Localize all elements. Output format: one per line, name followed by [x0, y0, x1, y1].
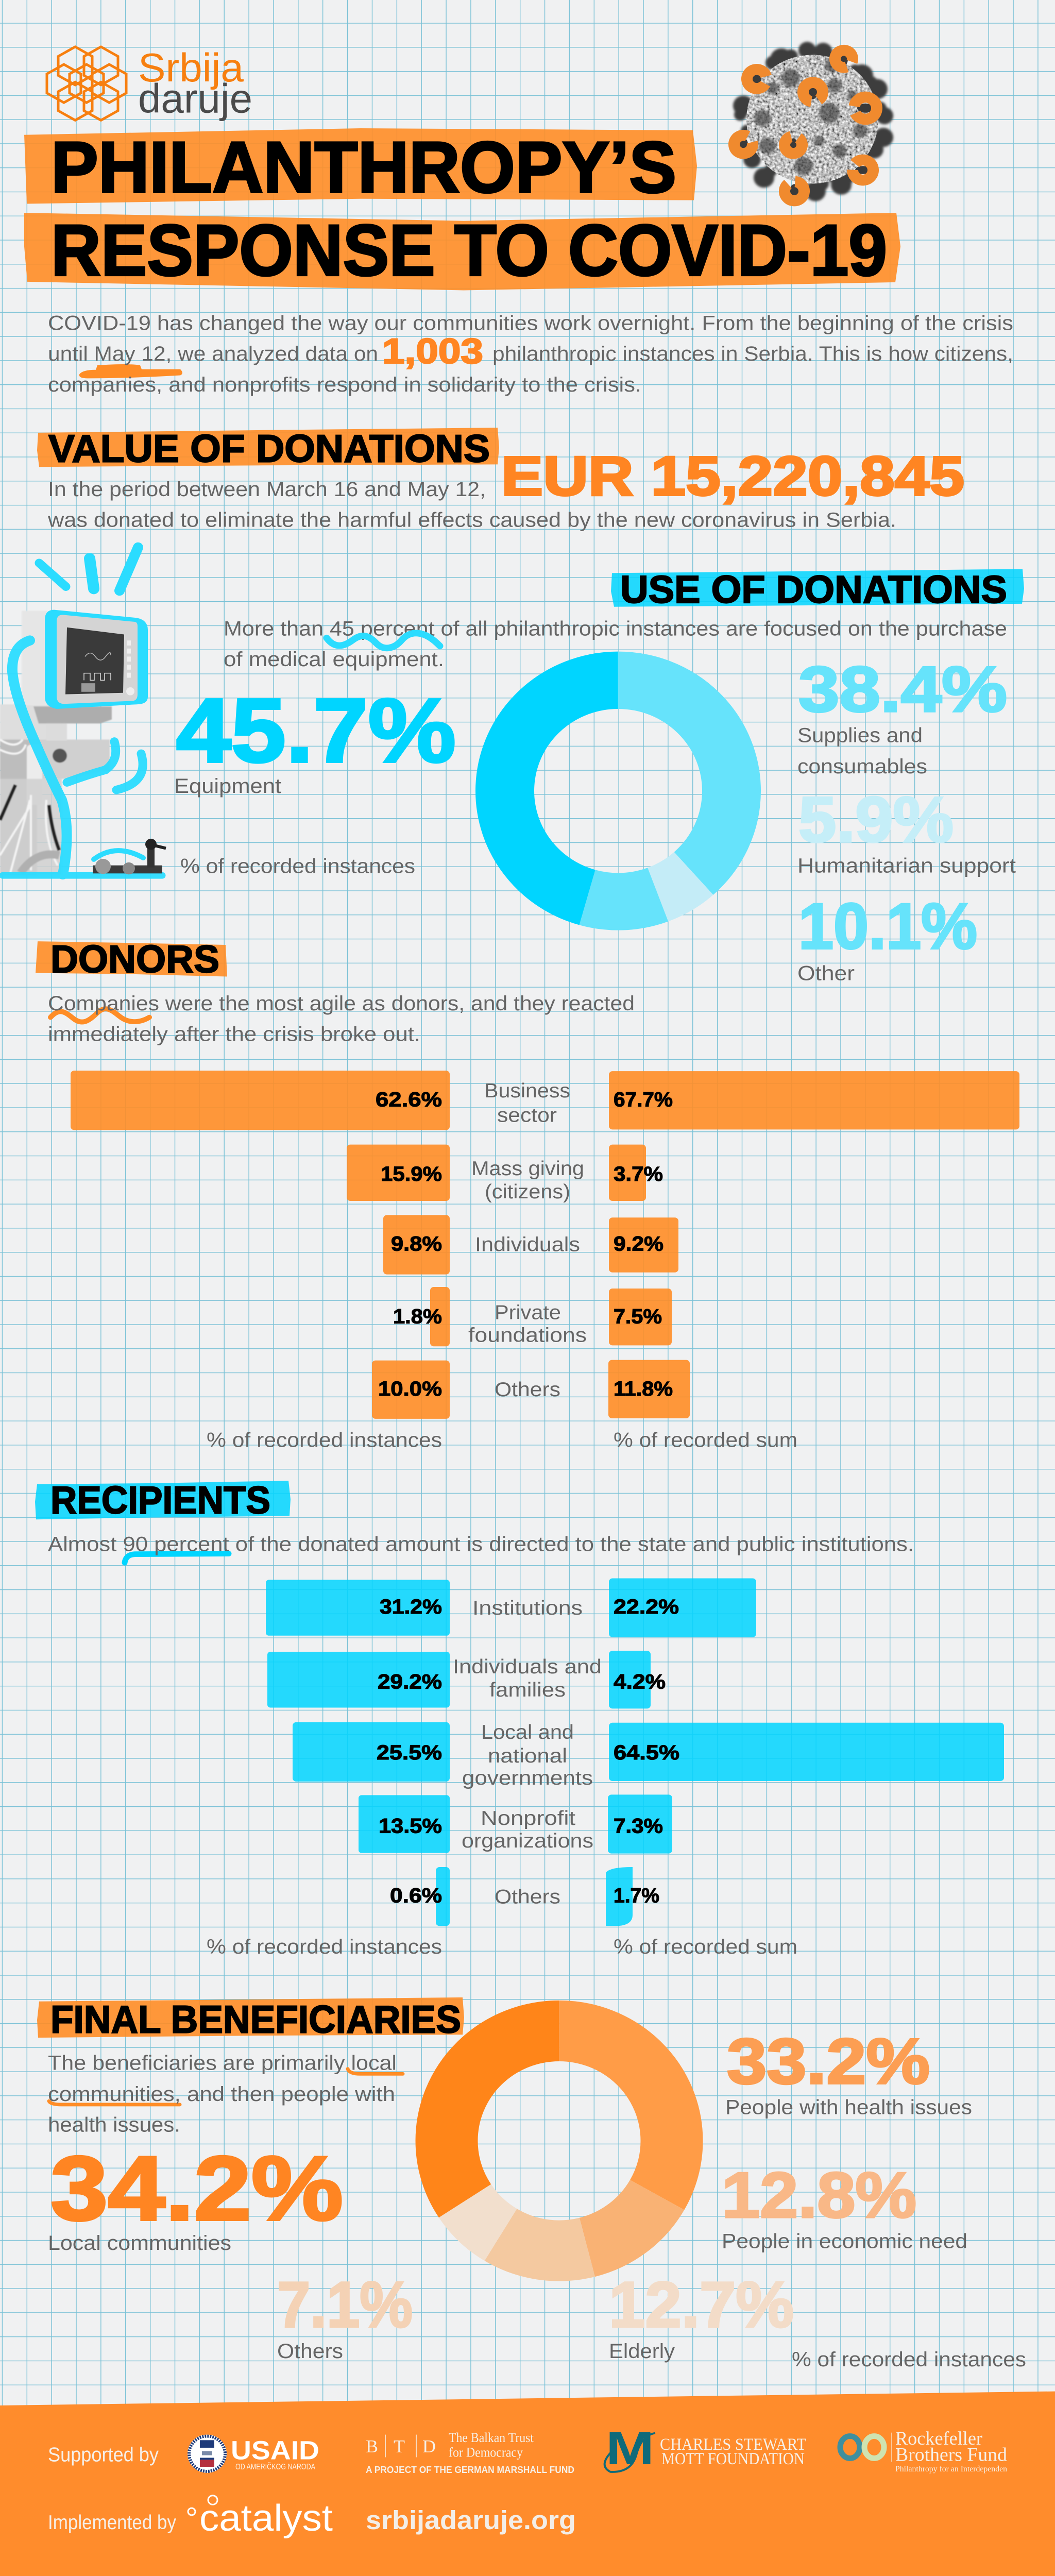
- supported by label: Supported by: [48, 2444, 159, 2466]
- row: business sector: sector: [497, 1104, 557, 1127]
- logo: Rockefeller Brothers Fund: Rockefeller: [895, 2428, 982, 2449]
- value of donations text: [47, 477, 896, 531]
- row: others: 0.6%: [390, 1884, 442, 1907]
- row: individuals: 9.2%: [614, 1232, 663, 1256]
- stat: 7.1% others: Others: [277, 2340, 343, 2363]
- stat: 45.7% equipment: Equipment: [174, 774, 281, 798]
- orange underlines: [348, 2069, 403, 2074]
- value of donations text: was donated to eliminate the harmful effects caused by the new coronavirus in Serbia.: [47, 508, 896, 531]
- row: local and national governments: 64.5%: [614, 1740, 679, 1764]
- dark centers of the rings: [739, 52, 874, 198]
- icon: coronavirus: [732, 42, 893, 201]
- axis captions: % of recorded instances: [207, 1935, 442, 1958]
- axis captions: % of recorded sum: [614, 1935, 797, 1958]
- logo: Rockefeller Brothers Fund: Philanthropy for an Interdependen: [895, 2465, 1007, 2473]
- logo: Balkan Trust: A PROJECT OF THE GERMAN MARSHALL FUND: [366, 2464, 574, 2475]
- value of donations text: In the period between March 16 and May 12,: [48, 477, 486, 501]
- row: local and national governments: 25.5%: [377, 1740, 442, 1764]
- row: individuals and families: 4.2%: [614, 1670, 666, 1693]
- stat: 12.7% elderly: 12.7%: [609, 2268, 794, 2341]
- row: local and national governments: Local and: [481, 1721, 574, 1743]
- logo: USAID: OD AMERIČKOG NARODA: [235, 2462, 315, 2471]
- logo: Balkan Trust: T: [394, 2436, 405, 2456]
- row: private foundations: [393, 1287, 672, 1346]
- stat: 38.4% supplies: 38.4%: [798, 653, 1007, 725]
- row: others: [390, 1867, 659, 1926]
- cyan squiggle: [327, 633, 440, 648]
- donut chart: use of donations: [505, 680, 731, 902]
- logo: Mott Foundation: [605, 2423, 806, 2475]
- row: individuals: 9.8%: [391, 1232, 442, 1256]
- row: others: 10.0%: [378, 1377, 442, 1400]
- row: individuals and families: [267, 1651, 666, 1708]
- stat: 34.2% local communities: Local communities: [48, 2231, 231, 2255]
- row: private foundations: foundations: [468, 1324, 587, 1346]
- row: others: Others: [495, 1886, 560, 1908]
- intro paragraph: until May 12, we analyzed data on: [48, 342, 378, 365]
- row: nonprofit organizations: 13.5%: [379, 1814, 442, 1838]
- logo: Srbija daruje: daruje: [138, 76, 252, 122]
- row: mass giving: [347, 1145, 663, 1203]
- cyan burst strokes: [39, 547, 138, 590]
- logo: USAID: USAID: [231, 2435, 319, 2465]
- stat: 38.4% supplies: [797, 653, 1007, 778]
- stat: 33.2% people with health issues: [725, 2025, 972, 2119]
- logo: Srbija daruje: Srbija: [138, 45, 244, 90]
- stat: 5.9% humanitarian support: Humanitarian support: [797, 854, 1016, 877]
- row: business sector: 67.7%: [614, 1088, 673, 1111]
- stat: 12.8% people in economic need: 12.8%: [722, 2159, 916, 2231]
- stat: 12.8% people in economic need: [722, 2159, 967, 2252]
- row: institutions: 22.2%: [614, 1595, 679, 1618]
- stat: 7.1% others: 7.1%: [277, 2268, 413, 2341]
- final beneficiaries text: [48, 2051, 403, 2137]
- row: private foundations: Private: [495, 1301, 561, 1324]
- row: others: 11.8%: [614, 1377, 673, 1400]
- gauge and regulator at base: [93, 839, 166, 874]
- donors text: [48, 991, 635, 1045]
- title line 2: RESPONSE TO COVID-19: [51, 210, 887, 291]
- stat: 12.7% elderly: Elderly: [609, 2340, 675, 2363]
- stat: 33.2% people with health issues: People with health issues: [725, 2095, 972, 2119]
- row: individuals: [383, 1215, 678, 1275]
- row: mass giving: (citizens): [485, 1181, 570, 1203]
- row: individuals and families: 29.2%: [378, 1670, 442, 1693]
- illustration: ventilator with cyan strokes: [0, 547, 166, 875]
- logo: Balkan Trust: [366, 2430, 574, 2475]
- heading: recipients: RECIPIENTS: [50, 1479, 270, 1522]
- row: others: Others: [495, 1378, 560, 1401]
- orange squiggle: [50, 1009, 149, 1022]
- monitor: [45, 610, 148, 709]
- row: others: 1.7%: [614, 1884, 659, 1907]
- logo: Rockefeller Brothers Fund: Brothers Fund: [895, 2445, 1007, 2465]
- logo: Mott Foundation: CHARLES STEWART: [660, 2435, 806, 2454]
- row: private foundations: 7.5%: [614, 1304, 662, 1328]
- use of donations text: of medical equipment.: [224, 647, 444, 671]
- recipients text: Almost 90 percent of the donated amount is directed to the state and public institutions.: [48, 1532, 914, 1556]
- implemented by label: Implemented by: [48, 2512, 176, 2534]
- intro paragraph: 1,003: [382, 331, 483, 371]
- logo: Catalyst: catalyst: [199, 2498, 333, 2539]
- bar chart: donors: [71, 1071, 1019, 1451]
- row: institutions: Institutions: [472, 1597, 583, 1619]
- row: local and national governments: [293, 1721, 1004, 1789]
- logo: Balkan Trust: D: [422, 2436, 436, 2456]
- row: mass giving: Mass giving: [471, 1158, 584, 1180]
- axis captions: % of recorded instances: [207, 1428, 442, 1451]
- bar chart: recipients: [207, 1578, 1004, 1958]
- row: individuals and families: families: [489, 1679, 566, 1701]
- donors text: Companies were the most agile as donors, and they reacted: [48, 991, 635, 1015]
- stat: 45.7% equipment: 45.7%: [176, 680, 456, 781]
- axis captions: [207, 1935, 797, 1958]
- row: private foundations: 1.8%: [393, 1304, 442, 1328]
- row: individuals: Individuals: [475, 1233, 580, 1256]
- stat: 34.2% local communities: 34.2%: [50, 2138, 343, 2239]
- heading: value of donations: VALUE OF DONATIONS: [48, 427, 490, 470]
- row: institutions: 31.2%: [380, 1595, 442, 1618]
- row: others: [372, 1360, 690, 1419]
- footer band: [0, 2392, 1055, 2576]
- row: business sector: 62.6%: [376, 1088, 442, 1111]
- scribble under May 12: [79, 364, 182, 378]
- stat: 10.1% other: Other: [797, 961, 855, 985]
- stat: 38.4% supplies: consumables: [797, 754, 927, 778]
- cyan underline: [125, 1554, 229, 1563]
- axis captions: [207, 1428, 797, 1451]
- stat: 10.1% other: 10.1%: [798, 890, 977, 962]
- heading: use of donations: USE OF DONATIONS: [620, 568, 1007, 612]
- logo: Balkan Trust: The Balkan Trust: [449, 2430, 534, 2445]
- intro paragraph: philanthropic instances in Serbia. This is how citizens,: [492, 342, 1013, 365]
- heading: final beneficiaries: FINAL BENEFICIARIES: [50, 1998, 461, 2041]
- logo: USAID: [188, 2435, 319, 2473]
- row: mass giving: 3.7%: [614, 1162, 663, 1185]
- row: local and national governments: national: [488, 1744, 567, 1767]
- row: institutions: [266, 1578, 756, 1637]
- use of donations text: More than 45 percent of all philanthropic instances are focused on the purchase: [224, 617, 1007, 640]
- caption: % of recorded instances: % of recorded instances: [180, 854, 415, 877]
- logo: Balkan Trust: for Democracy: [449, 2445, 523, 2460]
- logo: Rockefeller Brothers Fund: [840, 2428, 1007, 2473]
- row: nonprofit organizations: organizations: [462, 1829, 593, 1852]
- final beneficiaries text: health issues.: [48, 2113, 180, 2137]
- stat: 5.9% humanitarian support: 5.9%: [798, 783, 954, 855]
- caption: % of recorded instances: % of recorded instances: [792, 2347, 1026, 2371]
- intro paragraph: [48, 311, 1013, 396]
- final beneficiaries text: The beneficiaries are primarily local: [48, 2051, 397, 2074]
- stat: 38.4% supplies: Supplies and: [797, 723, 923, 747]
- stat: 12.8% people in economic need: People in economic need: [722, 2229, 967, 2252]
- row: business sector: Business: [484, 1079, 570, 1102]
- row: mass giving: 15.9%: [381, 1162, 442, 1185]
- logo: Srbija daruje: [47, 45, 252, 122]
- row: nonprofit organizations: [359, 1794, 672, 1854]
- row: nonprofit organizations: Nonprofit: [481, 1807, 575, 1829]
- axis captions: % of recorded sum: [614, 1428, 797, 1451]
- row: business sector: [71, 1071, 1019, 1130]
- row: local and national governments: governments: [462, 1767, 593, 1789]
- ventilator body in grey: [0, 611, 112, 875]
- logo: Mott Foundation: M: [606, 2423, 654, 2475]
- big value: EUR 15,220,845: EUR 15,220,845: [501, 446, 964, 507]
- logo: Mott Foundation: MOTT FOUNDATION: [661, 2450, 805, 2468]
- stat: 33.2% people with health issues: 33.2%: [727, 2025, 930, 2097]
- title line 1: PHILANTHROPY’S: [51, 127, 676, 208]
- donut chart: final beneficiaries: [447, 2031, 672, 2251]
- row: nonprofit organizations: 7.3%: [614, 1814, 663, 1838]
- final beneficiaries text: communities, and then people with: [48, 2082, 395, 2106]
- intro paragraph: companies, and nonprofits respond in solidarity to the crisis.: [48, 372, 641, 396]
- intro paragraph: COVID-19 has changed the way our communities work overnight. From the beginning of the crisis: [48, 311, 1013, 335]
- row: individuals and families: Individuals and: [453, 1655, 602, 1678]
- cyan tube and base outline: [3, 640, 162, 875]
- website url: srbijadaruje.org: [366, 2505, 576, 2535]
- logo: Balkan Trust: B: [366, 2436, 378, 2456]
- use of donations text: [224, 617, 1007, 671]
- orange rings on the virus: [732, 48, 878, 201]
- donors text: immediately after the crisis broke out.: [48, 1022, 420, 1045]
- heading: donors: DONORS: [50, 938, 219, 981]
- stat: 5.9% humanitarian support: [797, 783, 1016, 877]
